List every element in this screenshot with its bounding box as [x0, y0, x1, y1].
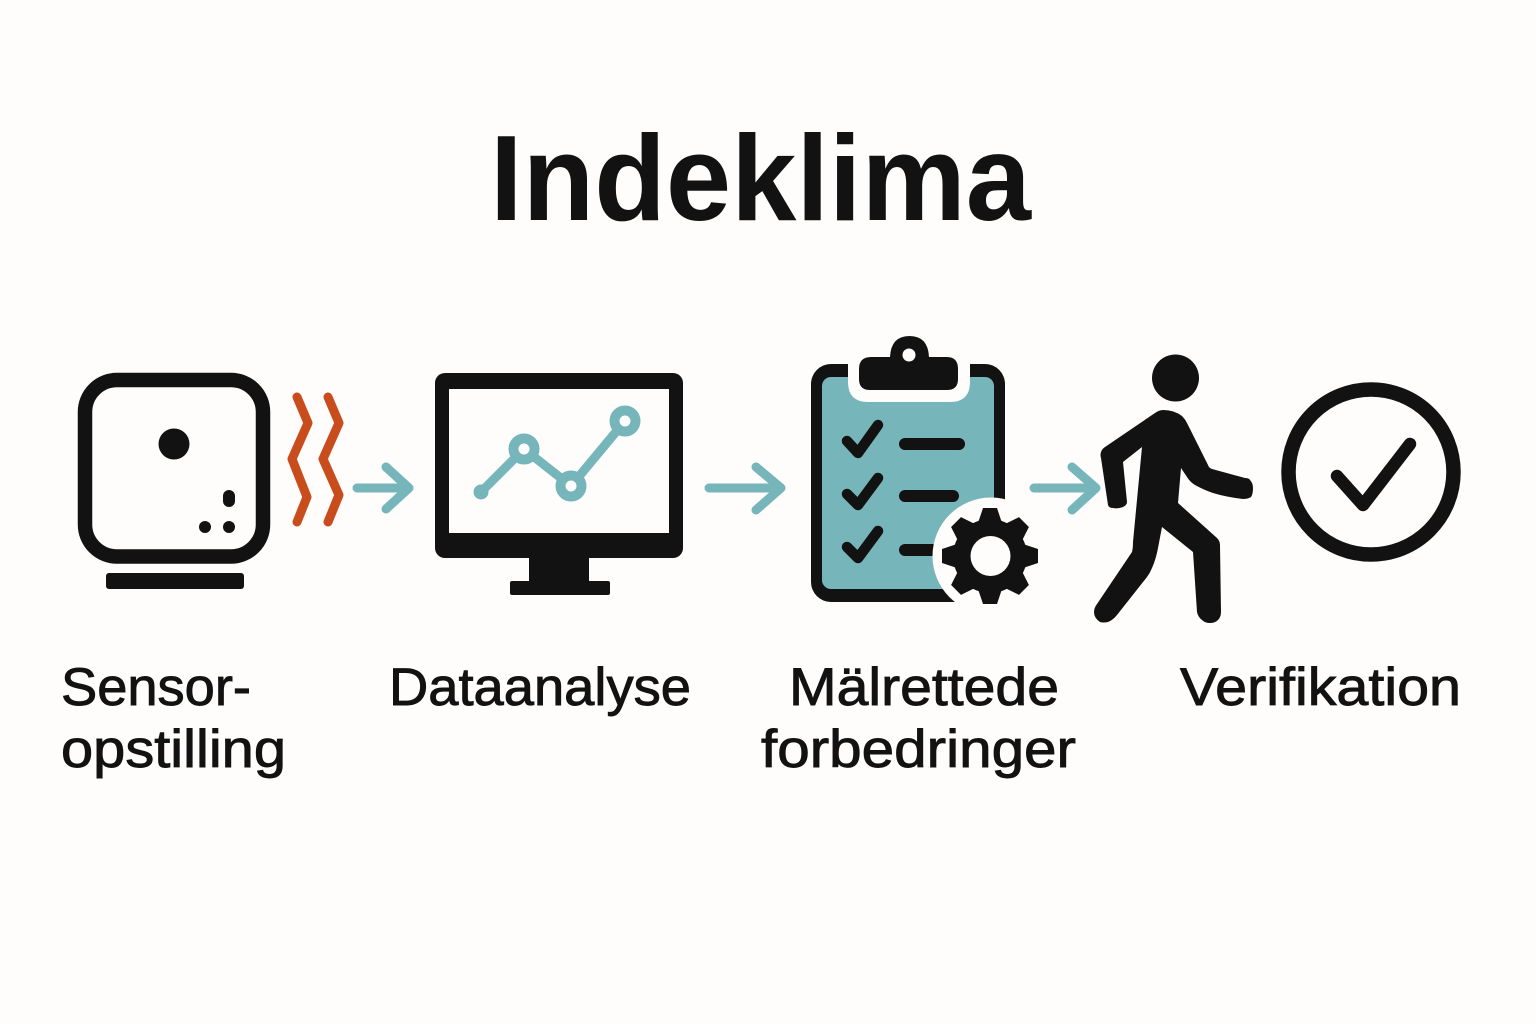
label: targeted improvements	[761, 658, 1076, 779]
label: sensor setup	[61, 658, 286, 779]
icon: clipboard checklist with gear	[811, 336, 1050, 614]
arrow: sensor to analysis	[357, 467, 409, 509]
arrow: improvements to verification	[1034, 467, 1096, 510]
title: Indeklima	[490, 110, 1032, 246]
label: sensor setup: opstilling	[61, 720, 286, 779]
icon: sensor waves	[292, 397, 339, 522]
icon: check circle	[1288, 390, 1454, 554]
label: targeted improvements: Mälrettede	[789, 658, 1059, 717]
icon: gear	[942, 508, 1038, 604]
label: targeted improvements: forbedringer	[761, 720, 1076, 779]
icon: monitor with line chart	[435, 373, 683, 595]
label: verification: Verifikation	[1180, 658, 1461, 717]
label: sensor setup: Sensor-	[61, 658, 251, 717]
icon: walking person	[1094, 354, 1253, 623]
label: data analysis: Dataanalyse	[389, 658, 691, 717]
icon: sensor device	[85, 380, 263, 589]
arrow: analysis to improvements	[709, 467, 781, 510]
